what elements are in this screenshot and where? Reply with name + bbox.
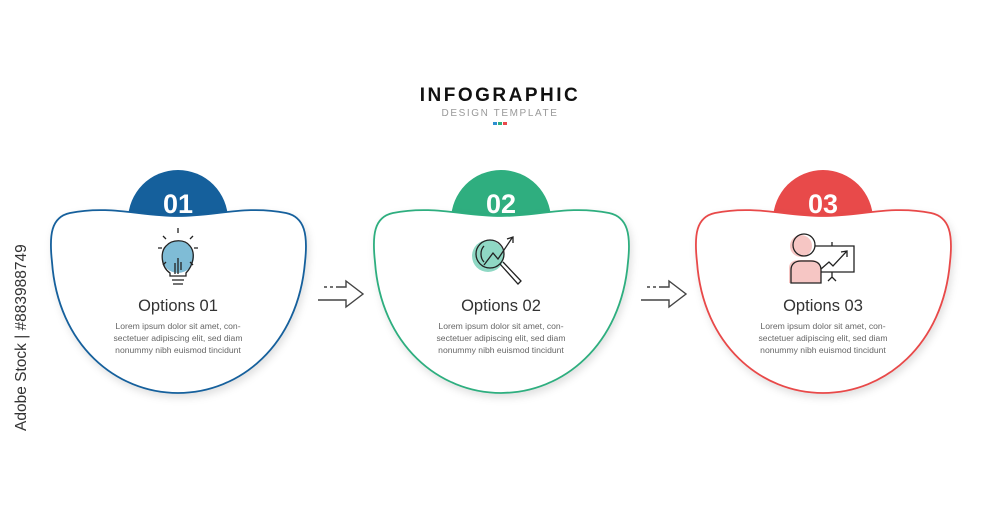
panel: option 01 [51,170,306,393]
heading: Options 01: Options 01 [138,297,218,315]
heading: Options 03: Options 03 [783,297,863,315]
text block: sectetuer adipiscing elit, sed diam [759,333,887,343]
title: DESIGN TEMPLATE [442,108,558,119]
text block: Lorem ipsum dolor sit amet, con- [115,321,241,331]
icon: light bulb [158,228,198,284]
heading: Options 02: Options 02 [461,297,541,315]
icon: magnifier with growth chart [472,237,521,284]
text block: sectetuer adipiscing elit, sed diam [114,333,242,343]
panel: option 03 [696,170,951,393]
number tab 02 [451,170,551,220]
title: INFOGRAPHIC [420,85,580,106]
text block [114,321,242,355]
text block: nonummy nibh euismod tincidunt [115,345,241,355]
text block [437,321,565,355]
arrow 1 [318,281,363,307]
number tab 03: 03 [808,189,838,219]
panel: option 02 [374,170,629,393]
arrow 2 [641,281,686,307]
number tab 01: 01 [163,189,193,219]
text block [759,321,887,355]
text block: nonummy nibh euismod tincidunt [760,345,886,355]
text block: sectetuer adipiscing elit, sed diam [437,333,565,343]
number tab 02: 02 [486,189,516,219]
side watermark text: Adobe Stock | #883988749 [13,244,30,431]
number tab 01 [128,170,228,220]
icon: presenter with chart [789,234,854,283]
text block: Lorem ipsum dolor sit amet, con- [760,321,886,331]
text block: nonummy nibh euismod tincidunt [438,345,564,355]
number tab 03 [773,170,873,220]
text block: Lorem ipsum dolor sit amet, con- [438,321,564,331]
title [420,85,580,125]
